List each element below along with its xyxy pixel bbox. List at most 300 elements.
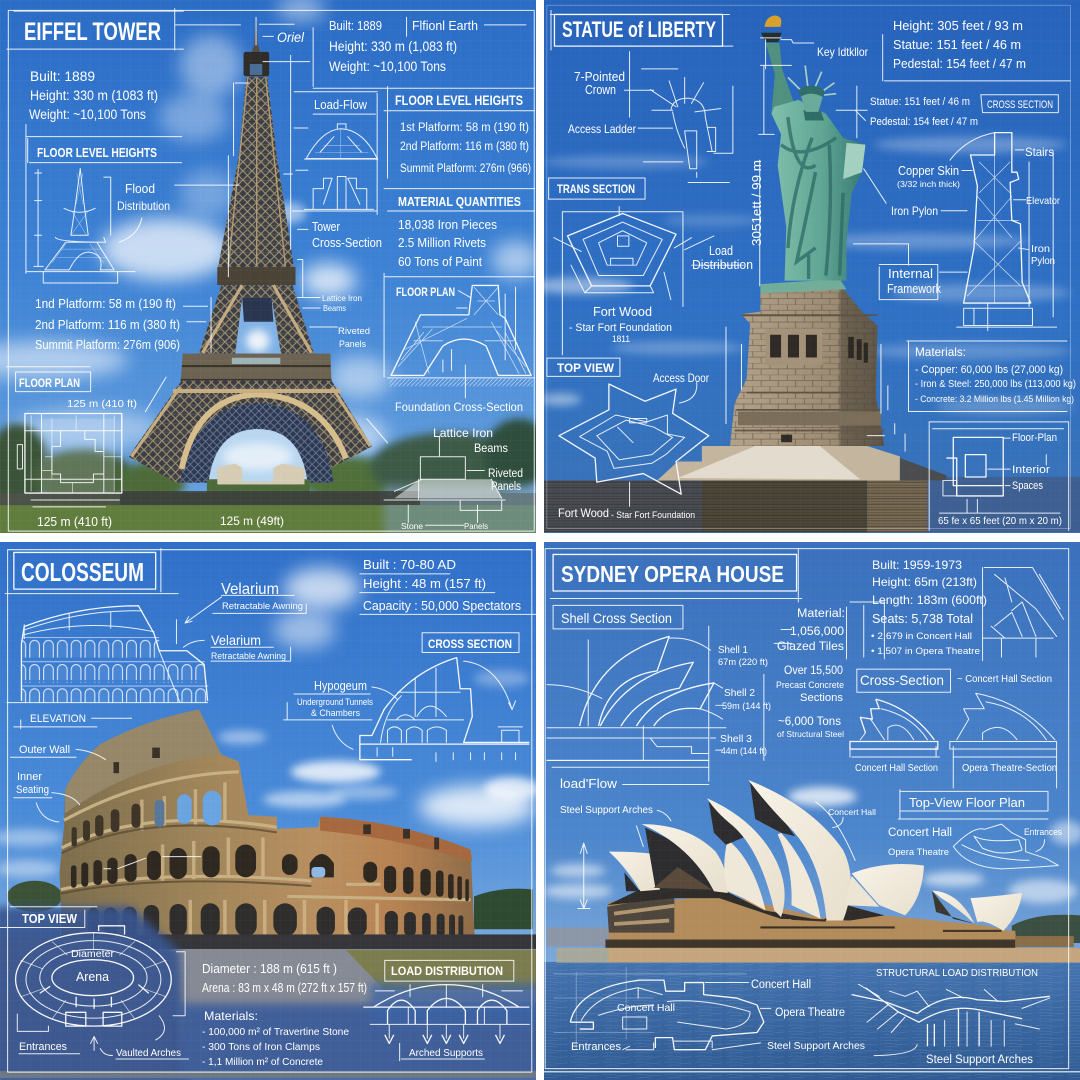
fact block top bbox=[893, 18, 1026, 71]
statue plinth bbox=[760, 279, 847, 293]
shell dimension labels: Shell 3 bbox=[720, 733, 752, 745]
diagram: arched load distribution bbox=[363, 985, 529, 1061]
label: cross-section bbox=[860, 672, 1052, 688]
fact block top: Pedestal: 154 feet / 47 m bbox=[893, 56, 1026, 71]
attic brick right bbox=[320, 817, 472, 862]
outer wall leaders bbox=[10, 749, 201, 869]
shell dimension labels: 44m (144 ft) bbox=[721, 746, 767, 757]
panel heading: Load-Flow: Load-Flow bbox=[314, 98, 368, 112]
floor plan section labels: Concert Hall bbox=[888, 827, 952, 839]
material column: Over 15,500 bbox=[784, 665, 843, 677]
shell dimension labels: 59m (144 ft) bbox=[722, 701, 771, 712]
far shore trees right bbox=[1012, 915, 1080, 943]
fact block top right: Weight: ~10,100 Tons bbox=[329, 59, 446, 74]
tablet bbox=[843, 143, 865, 179]
callouts: lattice and rivets: Lattice Iron bbox=[322, 293, 362, 303]
velarium callouts: Velarium bbox=[211, 632, 261, 648]
lower plan labels: Steel Support Arches bbox=[767, 1040, 865, 1052]
blueprint frame bbox=[0, 549, 536, 1072]
dimension labels bottom bbox=[37, 514, 284, 529]
trans section labels: Load bbox=[709, 244, 733, 258]
structural load label: STRUCTURAL LOAD DISTRIBUTION bbox=[876, 967, 1038, 979]
clouds bbox=[543, 787, 1080, 903]
columns bbox=[142, 782, 377, 934]
fact block: Built: 1959-1973 bbox=[872, 558, 962, 572]
crown labels: 7-Pointed bbox=[574, 70, 625, 84]
top view labels: Entrances bbox=[19, 1041, 67, 1053]
measurements and materials: Arena : 83 m x 48 m (272 ft x 157 ft) bbox=[202, 980, 367, 995]
diagram: arena top view bbox=[16, 926, 189, 1059]
beige legs bbox=[131, 285, 370, 457]
measurements and materials: - 300 Tons of Iron Clamps bbox=[202, 1042, 320, 1053]
water bbox=[540, 962, 1080, 1080]
materials block: Materials: bbox=[915, 345, 966, 359]
crown bbox=[798, 86, 824, 97]
panel: Eiffel Tower bbox=[0, 0, 554, 536]
labels: floor plan and foundation bbox=[395, 285, 523, 414]
shell F bbox=[932, 891, 975, 924]
diagram: shell cross section bbox=[547, 626, 764, 781]
labels: floor plan and foundation: FLOOR PLAN bbox=[396, 285, 455, 299]
lower plan labels: Entrances bbox=[571, 1041, 622, 1053]
top tier weathered wall bbox=[65, 710, 221, 813]
shell F dark bbox=[932, 891, 976, 924]
shell B bbox=[642, 824, 728, 893]
blueprint overlay bottom bbox=[180, 1004, 554, 1080]
internal structure labels: Pylon bbox=[1031, 255, 1055, 267]
section: floor level heights right: 2nd Platform: 116 m (380 ft) bbox=[400, 141, 529, 153]
top view labels bbox=[19, 949, 181, 1059]
internal structure labels: Iron bbox=[1031, 243, 1050, 255]
fact block top right: Height: 330 m (1,083 ft) bbox=[329, 39, 457, 54]
sky background bbox=[544, 0, 1080, 533]
outer wall labels bbox=[16, 744, 70, 796]
section: floor level heights left: FLOOR LEVEL HEIGHTS bbox=[37, 145, 157, 160]
panel: Colosseum bbox=[0, 542, 554, 1080]
shell C inner bbox=[778, 833, 821, 919]
heading: Sydney Opera House: SYDNEY OPERA HOUSE bbox=[561, 561, 784, 587]
load flow labels bbox=[560, 776, 653, 816]
ground lower right bbox=[927, 477, 1080, 532]
dimension labels bottom: 125 m (410 ft) bbox=[37, 515, 112, 529]
fact block: • 1,507 in Opera Theatre bbox=[871, 646, 980, 657]
top tier sky arches bbox=[177, 791, 221, 825]
material column: ~6,000 Tons bbox=[778, 716, 841, 728]
measurements and materials: - 1,1 Million m² of Concrete bbox=[202, 1057, 323, 1068]
section: floor level heights right: FLOOR LEVEL HEIGHTS bbox=[395, 92, 523, 108]
fact block: Built : 70-80 AD bbox=[363, 558, 456, 572]
internal structure labels bbox=[887, 145, 1060, 296]
shell A dark bbox=[624, 872, 640, 891]
diagram: concert hall section bbox=[850, 693, 1057, 757]
outer wall labels: Outer Wall bbox=[19, 744, 70, 756]
label: shell cross section: Shell Cross Section bbox=[561, 611, 672, 626]
fact block: Seats: 5,738 Total bbox=[872, 612, 973, 626]
section labels bbox=[855, 763, 1057, 774]
fort wood caption bbox=[558, 506, 695, 520]
top view labels: Vaulted Arches bbox=[116, 1048, 181, 1059]
section: material quantities bbox=[398, 194, 521, 269]
diagram: floor plan tower legs bbox=[388, 285, 535, 398]
trans section labels: 1811 bbox=[612, 334, 630, 345]
heading: Eiffel Tower: EIFFEL TOWER bbox=[24, 18, 161, 46]
sky background bbox=[544, 542, 1080, 1080]
section: trans section: TRANS SECTION bbox=[557, 184, 635, 196]
foundation callouts: Lattice Iron bbox=[433, 426, 493, 440]
floor plan section labels: Top-View Floor Plan bbox=[909, 796, 1025, 810]
arch opening sky bbox=[209, 429, 308, 484]
terrace right shade bbox=[900, 458, 946, 480]
trans section labels: - Star Fort Foundation bbox=[569, 322, 672, 334]
lower plan labels: Concert Hall bbox=[751, 979, 811, 991]
shell C dark bbox=[709, 802, 747, 845]
wall coursing bbox=[540, 480, 929, 532]
panel: Statue of Liberty bbox=[530, 0, 1080, 533]
ground, trees and crowd bbox=[0, 419, 554, 536]
loggia windows front bbox=[770, 335, 817, 442]
cross section label: CROSS SECTION bbox=[987, 99, 1053, 111]
material column: Material: bbox=[797, 608, 845, 620]
load flow labels: load'Flow bbox=[560, 776, 618, 791]
fact block: • 2,679 in Concert Hall bbox=[871, 631, 972, 642]
far shore left bbox=[547, 927, 612, 946]
robe bbox=[771, 100, 865, 281]
shell dimension labels: 67m (220 ft) bbox=[718, 657, 768, 668]
panel: Sydney Opera House bbox=[540, 542, 1080, 1080]
shell B inner bbox=[724, 840, 766, 910]
shaft highlights bbox=[228, 78, 285, 266]
section: top view: TOP VIEW bbox=[22, 912, 77, 926]
heading: Statue of Liberty: STATUE of LIBERTY bbox=[562, 17, 716, 42]
roof brown under B bbox=[654, 867, 712, 890]
balcony bands bbox=[614, 906, 674, 924]
building behind bbox=[217, 464, 304, 484]
hypogeum callout: Hypogeum bbox=[314, 679, 367, 693]
measurements and materials: Diameter : 188 m (615 ft ) bbox=[202, 961, 337, 976]
label: Oriel: Oriel bbox=[277, 29, 305, 45]
section: material quantities: 18,038 Iron Pieces bbox=[398, 217, 497, 232]
fact block: Height : 48 m (157 ft) bbox=[363, 576, 486, 591]
trans section labels: Distribution bbox=[692, 258, 753, 272]
section: material quantities: 2.5 Million Rivets bbox=[398, 235, 486, 250]
velarium callouts: Retractable Awning bbox=[222, 601, 303, 612]
opening cloud bbox=[246, 330, 270, 352]
left tiered balconies bbox=[607, 895, 674, 933]
raised arm bbox=[766, 43, 794, 121]
section: material quantities: 60 Tons of Paint bbox=[398, 254, 482, 269]
fact block left: Height: 330 m (1083 ft) bbox=[30, 88, 158, 103]
foundation callouts: Riveted bbox=[488, 468, 523, 480]
foundation callouts: Stone bbox=[401, 521, 423, 531]
dimension labels bottom: 125 m (49ft) bbox=[220, 514, 284, 528]
secondary dimensions: Statue: 151 feet / 46 m bbox=[870, 96, 970, 108]
loggia windows side bbox=[848, 337, 868, 363]
diagram: mini tower bbox=[34, 169, 142, 283]
fact block: Capacity : 50,000 Spectators bbox=[363, 599, 521, 613]
section: floor plan left: FLOOR PLAN bbox=[19, 378, 80, 390]
load distribution label: LOAD DISTRIBUTION bbox=[391, 964, 503, 978]
second platform bbox=[217, 267, 295, 285]
Sydney Opera House photo bbox=[540, 780, 1080, 1080]
podium upper mass bbox=[712, 891, 1015, 933]
section: top view: TOP VIEW bbox=[557, 361, 615, 375]
diagram: top right shells bbox=[983, 568, 1063, 661]
podium bbox=[609, 895, 1017, 948]
lower plan labels: Steel Support Arches bbox=[926, 1054, 1033, 1066]
trans section labels: Fort Wood bbox=[593, 304, 652, 319]
diagram: structural load distribution bbox=[852, 984, 1050, 1056]
secondary dimensions: Pedestal: 154 feet / 47 m bbox=[870, 116, 978, 128]
vertical dimension: 3051ett / 99 m bbox=[750, 160, 764, 246]
floor plan section labels: Opera Theatre bbox=[888, 847, 949, 858]
diagram: load-flow dome bbox=[304, 124, 378, 209]
fact block left: Built: 1889 bbox=[30, 69, 95, 84]
internal structure labels: Framework bbox=[887, 282, 942, 296]
label: concert hall on shell: Concert Hall bbox=[828, 807, 876, 817]
callouts: lattice and rivets bbox=[322, 293, 370, 350]
water ripples bbox=[540, 962, 1080, 1080]
callouts: lattice and rivets: Riveted bbox=[338, 326, 370, 337]
outer wall labels: Seating bbox=[16, 784, 49, 796]
blueprint grid bbox=[0, 542, 536, 1080]
stone course bbox=[738, 412, 881, 425]
crowd band bbox=[120, 491, 420, 505]
spire and top cabin bbox=[244, 14, 269, 76]
blueprint frame and leader lines bbox=[547, 5, 1070, 529]
labels: floor plan and foundation: Foundation Cross-Section bbox=[395, 400, 523, 414]
measurements and materials: Materials: bbox=[204, 1009, 258, 1023]
shell D bbox=[748, 780, 851, 921]
platform labels: Summit Platform: 276m (906) bbox=[35, 338, 180, 352]
platform glass bbox=[232, 358, 280, 364]
fact block bbox=[363, 558, 521, 613]
top view labels: Arena bbox=[76, 970, 109, 984]
trees left bbox=[7, 881, 62, 912]
road and ground bbox=[0, 938, 540, 1076]
fact block: Length: 183m (600ft) bbox=[872, 593, 987, 607]
Colosseum photo bbox=[0, 710, 554, 1080]
diagram: foundation block bbox=[384, 436, 505, 525]
velarium callouts: Retractable Awning bbox=[211, 651, 286, 662]
velarium callouts: Velarium bbox=[221, 581, 279, 598]
diagram: seven-pointed crown bbox=[624, 52, 733, 183]
robe folds bbox=[781, 117, 843, 279]
forecourt platform bbox=[557, 948, 1080, 963]
hypogeum callout: Underground Tunnels bbox=[297, 697, 373, 708]
shell dimension labels: Shell 2 bbox=[724, 687, 755, 699]
ground tier arches bbox=[88, 903, 463, 937]
lower plan labels: Opera Theatre bbox=[775, 1007, 845, 1019]
neck shadow bbox=[803, 110, 824, 121]
section: floor level heights left: Flood bbox=[125, 182, 155, 196]
section: material quantities: MATERIAL QUANTITIES bbox=[398, 194, 521, 209]
label: cross-section: ~ Concert Hall Section bbox=[957, 674, 1052, 685]
material column bbox=[776, 608, 845, 739]
diagram: floor plan bbox=[929, 422, 1069, 530]
fact block top right bbox=[329, 18, 478, 74]
secondary dimensions bbox=[870, 96, 978, 128]
shell dimension labels bbox=[718, 644, 771, 757]
upper shaft bbox=[218, 77, 294, 268]
platform labels: 1nd Platform: 58 m (190 ft) bbox=[35, 297, 176, 311]
shell A bbox=[609, 852, 660, 891]
wispy clouds bbox=[530, 136, 1074, 415]
foundation callouts bbox=[401, 426, 523, 531]
diagram: internal pylon cross-section bbox=[941, 133, 1057, 331]
elevation label: ELEVATION bbox=[30, 713, 86, 725]
platform labels: 2nd Platform: 116 m (380 ft) bbox=[35, 318, 180, 332]
pedestal bands bbox=[735, 315, 884, 431]
top tier sky narrow bbox=[155, 800, 164, 827]
floor plan section labels: Entrances bbox=[1024, 827, 1062, 837]
section: floor level heights left: Distribution bbox=[117, 199, 170, 213]
crown labels: Crown bbox=[585, 83, 616, 97]
grass right bbox=[346, 950, 540, 990]
outer wall labels: Inner bbox=[17, 771, 42, 783]
diagram: star fort top view bbox=[559, 382, 709, 506]
bottom frame line bbox=[544, 1071, 1080, 1072]
shell E lower bbox=[845, 876, 879, 907]
materials block: - Copper: 60,000 lbs (27,000 kg) bbox=[915, 364, 1063, 376]
diagram: floor plan left bbox=[17, 413, 122, 507]
middle tier arches bbox=[71, 844, 469, 901]
arch opening cloud bbox=[223, 443, 292, 471]
shell G bbox=[970, 893, 1022, 931]
callouts: lattice and rivets: Panels bbox=[339, 339, 366, 350]
internal structure labels: (3/32 inch thick) bbox=[897, 179, 960, 189]
lower plan labels: Concert Hall bbox=[617, 1002, 675, 1014]
material column: Glazed Tiles bbox=[777, 639, 844, 653]
measurements and materials bbox=[202, 961, 367, 1068]
platform left tint bbox=[557, 948, 608, 963]
section: floor level heights right: Summit Platform: 276m (966) bbox=[400, 163, 531, 175]
clouds bbox=[0, 0, 540, 457]
blueprint overlay right bbox=[370, 983, 554, 1024]
fact block left bbox=[29, 69, 158, 122]
labels: tower cross-section: Cross-Section bbox=[312, 236, 382, 250]
torch cup bbox=[761, 33, 782, 42]
crown labels bbox=[568, 70, 636, 136]
hypogeum callout bbox=[297, 679, 373, 719]
ground wall right bbox=[867, 480, 929, 532]
blueprint grid bbox=[544, 542, 1080, 1080]
foundation callouts: Beams bbox=[474, 441, 508, 455]
internal structure labels: Iron Pylon bbox=[891, 204, 938, 218]
internal structure labels: Internal bbox=[888, 267, 933, 281]
material column: Precast Concrete bbox=[776, 680, 844, 691]
section labels: Concert Hall Section bbox=[855, 763, 938, 774]
section: floor level heights right bbox=[395, 92, 531, 175]
section: floor level heights right: 1st Platform: 58 m (190 ft) bbox=[400, 122, 529, 134]
labels: tower cross-section: Tower bbox=[312, 220, 340, 234]
diagram: colosseum elevation bbox=[21, 606, 208, 703]
fact block top: Statue: 151 feet / 46 m bbox=[893, 37, 1021, 52]
crowd band bbox=[131, 934, 536, 949]
shell B dark bbox=[645, 828, 712, 888]
crown rays bbox=[788, 65, 836, 95]
lower plan labels bbox=[571, 979, 1033, 1066]
cross section label: CROSS SECTION bbox=[428, 637, 512, 651]
section: floor plan left bbox=[19, 378, 137, 410]
lower legs bbox=[129, 381, 372, 483]
Eiffel Tower photo bbox=[129, 14, 372, 493]
labels: tower cross-section bbox=[312, 222, 382, 247]
blueprint grid bbox=[544, 0, 1080, 533]
shell C bbox=[707, 798, 785, 917]
platform bands bbox=[181, 366, 331, 380]
shell dimension labels: Shell 1 bbox=[718, 644, 748, 656]
internal structure labels: Stairs bbox=[1025, 145, 1054, 159]
fact block top right: Built: 1889 bbox=[329, 18, 382, 33]
top view labels: Diameter bbox=[71, 949, 115, 960]
floor plan section labels bbox=[888, 796, 1062, 858]
diagram: lower plan bbox=[554, 967, 771, 1050]
podium base windows bbox=[605, 940, 1015, 948]
material column: Sections bbox=[800, 692, 843, 704]
beige main arch bbox=[182, 394, 346, 469]
fact block: Height: 65m (213ft) bbox=[872, 575, 977, 589]
tier cornices bbox=[61, 772, 471, 900]
terrace bbox=[657, 446, 900, 480]
right lower deck bbox=[1015, 936, 1074, 947]
internal structure labels: Copper Skin bbox=[898, 164, 959, 178]
blueprint grid bbox=[0, 0, 536, 533]
white roof bbox=[678, 443, 860, 479]
blueprint overlay left bbox=[0, 907, 187, 1080]
colosseum mass bbox=[60, 710, 475, 938]
materials block bbox=[915, 345, 1076, 405]
label: key identifier: Key Idtkllor bbox=[817, 45, 868, 59]
floor plan labels: 65 fe x 65 feet (20 m x 20 m) bbox=[938, 515, 1062, 527]
first platform bbox=[181, 354, 331, 382]
diagram: cross section bbox=[284, 658, 529, 761]
Statue of Liberty photo bbox=[540, 15, 1080, 532]
leg opening dark bbox=[242, 298, 273, 322]
floor plan labels: Spaces bbox=[1012, 480, 1043, 492]
foundation callouts: Panels bbox=[464, 521, 488, 531]
fact block left: Weight: ~10,100 Tons bbox=[29, 107, 146, 122]
fort wood caption: - Star Fort Foundation bbox=[611, 510, 695, 520]
diagram: top-view floor plan bbox=[953, 824, 1058, 869]
diagram: trans section fort bbox=[554, 207, 743, 355]
floor plan labels: Interior bbox=[1012, 464, 1050, 476]
trees right bbox=[474, 889, 533, 929]
trans section labels bbox=[569, 244, 753, 345]
heading: Colosseum: COLOSSEUM bbox=[21, 557, 144, 587]
hypogeum callout: & Chambers bbox=[311, 708, 360, 719]
label: cross-section: Cross-Section bbox=[860, 672, 944, 688]
crown labels: Access Ladder bbox=[568, 122, 636, 136]
fact block bbox=[871, 558, 987, 657]
pedestal bbox=[730, 289, 884, 446]
floor plan labels: Floor-Plan bbox=[1012, 432, 1057, 444]
bottom strip bbox=[0, 1071, 540, 1078]
trees under arch bbox=[207, 479, 310, 493]
upper legs bbox=[199, 285, 314, 354]
loggia frame bbox=[766, 329, 822, 365]
callouts: lattice and rivets: Beams bbox=[323, 303, 346, 313]
label: access door: Access Door bbox=[653, 373, 709, 385]
sky background bbox=[0, 542, 536, 1080]
small windows bbox=[113, 748, 439, 849]
shell D dark bbox=[750, 783, 795, 836]
fact block top right: Flfionl Earth bbox=[412, 18, 478, 33]
fort wood caption: Fort Wood bbox=[558, 506, 609, 520]
shell E bbox=[852, 864, 924, 915]
tier shadows bbox=[61, 825, 311, 894]
ground wall left bbox=[540, 480, 702, 532]
foundation callouts: Panels bbox=[491, 481, 521, 493]
